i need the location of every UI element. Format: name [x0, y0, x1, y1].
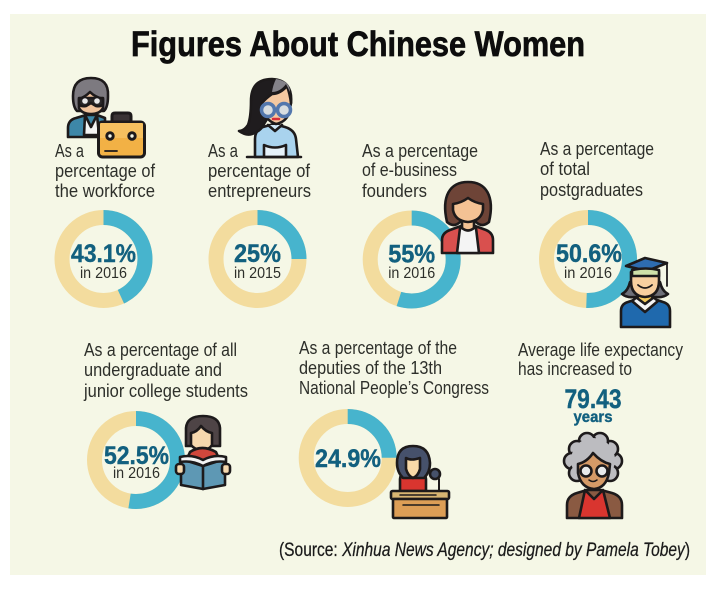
text: workforce description: [55, 141, 156, 201]
value: 43.1% in 2016: 43.1%: [71, 240, 136, 268]
text: life expectancy description: has increased to: [518, 359, 632, 379]
text: workforce description: the workforce: [55, 181, 155, 201]
icon: woman in red jacket: [442, 182, 493, 253]
text: undergraduate description: junior college students: [83, 381, 248, 401]
text: undergraduate description: [83, 340, 248, 401]
text: deputies description: [299, 338, 489, 398]
text: e-business description: founders: [362, 181, 427, 201]
icon: businesswoman with briefcase: [68, 78, 144, 157]
value: 43.1% in 2016: in 2016: [80, 265, 127, 282]
text: postgraduates description: postgraduates: [540, 180, 643, 200]
text: e-business description: As a percentage: [362, 141, 478, 161]
text: entrepreneurs description: As a: [208, 141, 239, 161]
stat: NPC deputies: [299, 338, 489, 518]
stat: life expectancy: [518, 340, 683, 518]
text: deputies description: National People’s Congress: [299, 378, 489, 398]
value: 50.6% in 2016: [556, 240, 622, 282]
donut: 52.5%: [94, 418, 178, 502]
icon: graduate: [621, 258, 670, 327]
stat: workforce: [55, 78, 156, 300]
icon: student reading a book: [176, 416, 230, 489]
text: deputies description: As a percentage of the: [299, 338, 457, 358]
value: 55% in 2016: 55%: [388, 240, 435, 268]
icon: woman with blue glasses: [239, 79, 301, 157]
value: 55% in 2016: in 2016: [388, 265, 435, 282]
icon: elderly woman with glasses: [564, 433, 622, 518]
text: postgraduates description: As a percentage: [540, 139, 654, 159]
value: 25% in 2015: in 2015: [234, 265, 281, 282]
text: undergraduate description: As a percentage of all: [84, 340, 237, 360]
value: 52.5% in 2016: 52.5%: [104, 442, 169, 470]
stat: postgraduates: [540, 139, 670, 327]
value: 50.6% in 2016: in 2016: [564, 265, 612, 282]
value: 25% in 2015: 25%: [234, 240, 281, 268]
text: entrepreneurs description: percentage of: [208, 161, 311, 181]
value: 52.5% in 2016: [104, 442, 169, 482]
stat: undergraduate students: [83, 340, 248, 502]
text: life expectancy description: Average life expectancy: [518, 340, 683, 360]
value: 43.1% in 2016: [71, 240, 136, 282]
donut: 50.6%: [546, 218, 630, 300]
value: 50.6% in 2016: 50.6%: [556, 240, 622, 268]
value: 79.43 years: 79.43: [564, 384, 622, 414]
donut: 25%: [216, 218, 299, 300]
text: postgraduates description: of total: [540, 159, 590, 179]
text: workforce description: percentage of: [55, 161, 156, 181]
text: undergraduate description: undergraduate and: [84, 360, 222, 380]
value: 25% in 2015: [234, 240, 281, 282]
value: 79.43 years: [564, 384, 622, 426]
text: life expectancy description: [518, 340, 683, 379]
text: deputies description: deputies of the 13th: [299, 358, 442, 378]
text: e-business description: [362, 141, 478, 201]
text: postgraduates description: [540, 139, 654, 200]
donut: 55%: [370, 218, 453, 301]
text: e-business description: of e-business: [362, 160, 457, 180]
stat: entrepreneurs: [208, 79, 311, 300]
title: Figures About Chinese Women: [131, 25, 585, 64]
stat: e-business founders: [362, 141, 493, 301]
value: 55% in 2016: [388, 240, 435, 282]
value: 52.5% in 2016: in 2016: [113, 465, 160, 482]
value: 79.43 years: years: [574, 409, 613, 426]
text: entrepreneurs description: entrepreneurs: [208, 181, 311, 201]
icon: speaker at podium with microphone: [391, 446, 449, 518]
value: 24.9%: 24.9%: [315, 445, 381, 473]
donut: 43.1%: [62, 218, 145, 300]
text: workforce description: As a: [55, 141, 85, 161]
text: entrepreneurs description: [208, 141, 311, 201]
donut: 24.9%: [306, 416, 389, 500]
